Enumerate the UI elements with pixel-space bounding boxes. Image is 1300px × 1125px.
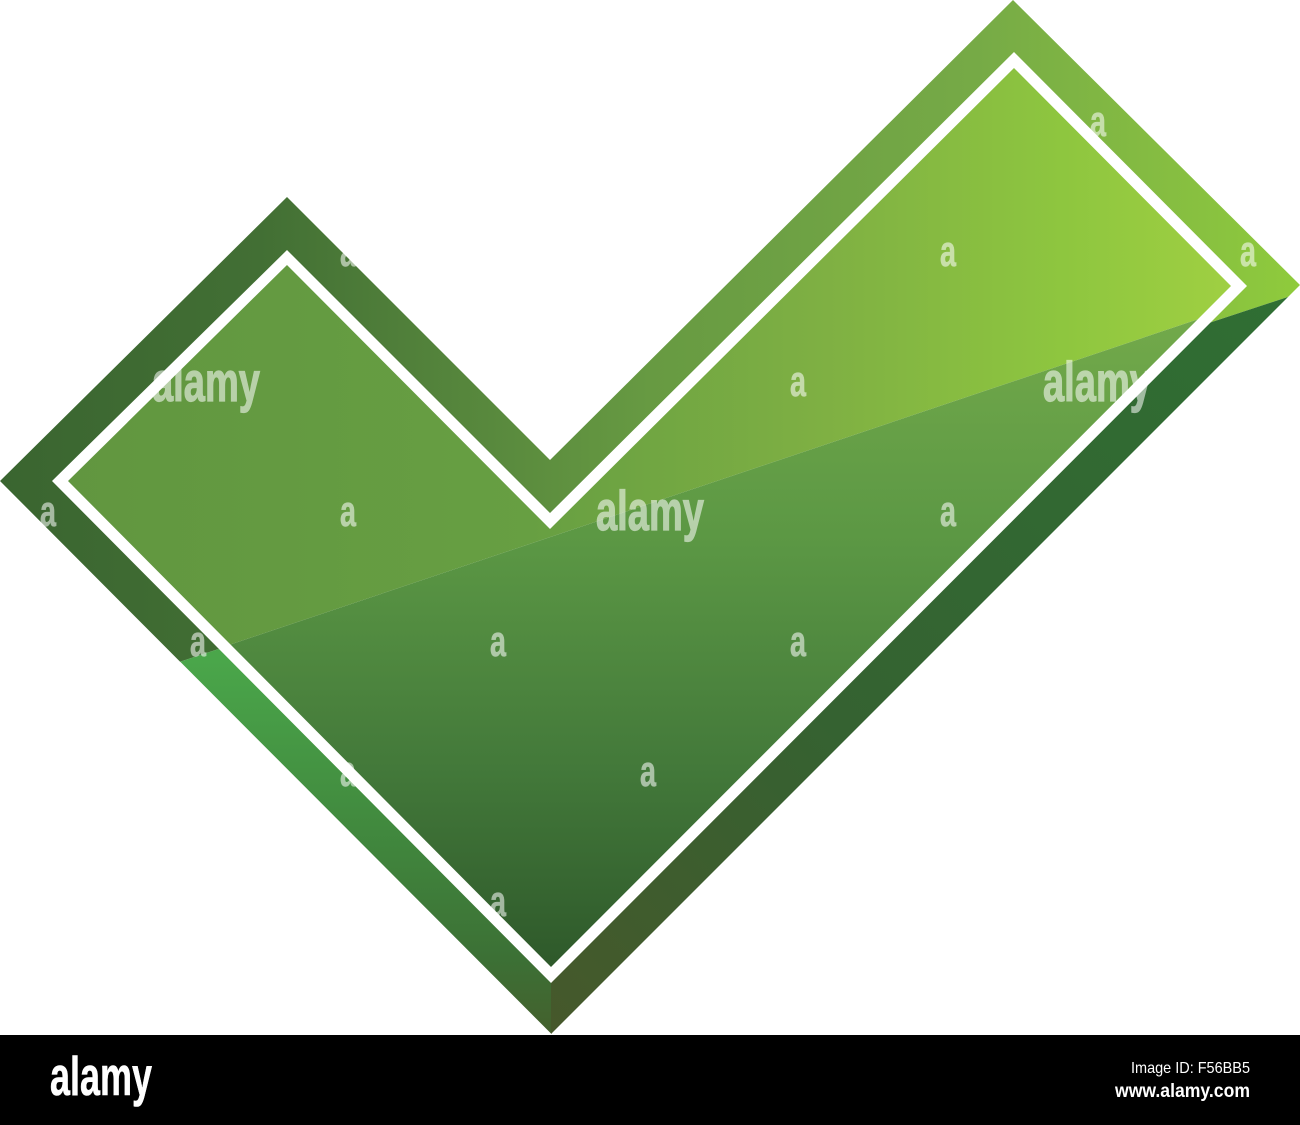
watermark: small repeated marks: a [1090, 97, 1106, 146]
inner face, upper [68, 68, 1231, 644]
watermark: small repeated marks: a [1240, 227, 1256, 276]
check mark outer band, upper [0, 0, 1300, 662]
check mark outer band, lower left [180, 649, 552, 1034]
footer logo: alamy [50, 1045, 152, 1107]
white frame [52, 52, 1247, 983]
watermark: large logos: alamy [152, 350, 260, 413]
watermark: small repeated marks: a [490, 617, 506, 666]
watermark: small repeated marks: a [340, 747, 356, 796]
watermark: small repeated marks: a [190, 617, 206, 666]
watermark: large logos: alamy [1043, 350, 1151, 413]
watermark: small repeated marks: a [40, 487, 56, 536]
watermark: small repeated marks: a [340, 227, 356, 276]
watermark: small repeated marks: a [940, 487, 956, 536]
watermark: small repeated marks: a [340, 487, 356, 536]
watermark: small repeated marks: a [940, 227, 956, 276]
watermark: large logos [152, 350, 1151, 542]
footer bar [0, 1035, 1300, 1125]
watermark: large logos: alamy [596, 479, 704, 542]
watermark: small repeated marks [40, 97, 1256, 926]
watermark: small repeated marks: a [790, 357, 806, 406]
watermark: small repeated marks: a [490, 877, 506, 926]
inner face, lower [230, 319, 1198, 967]
watermark: small repeated marks: a [790, 617, 806, 666]
image id: Image ID: F56BB5 [1131, 1060, 1250, 1077]
check mark outer band, lower right [551, 296, 1288, 1034]
watermark: small repeated marks: a [640, 747, 656, 796]
website: www.alamy.com [1114, 1081, 1250, 1102]
